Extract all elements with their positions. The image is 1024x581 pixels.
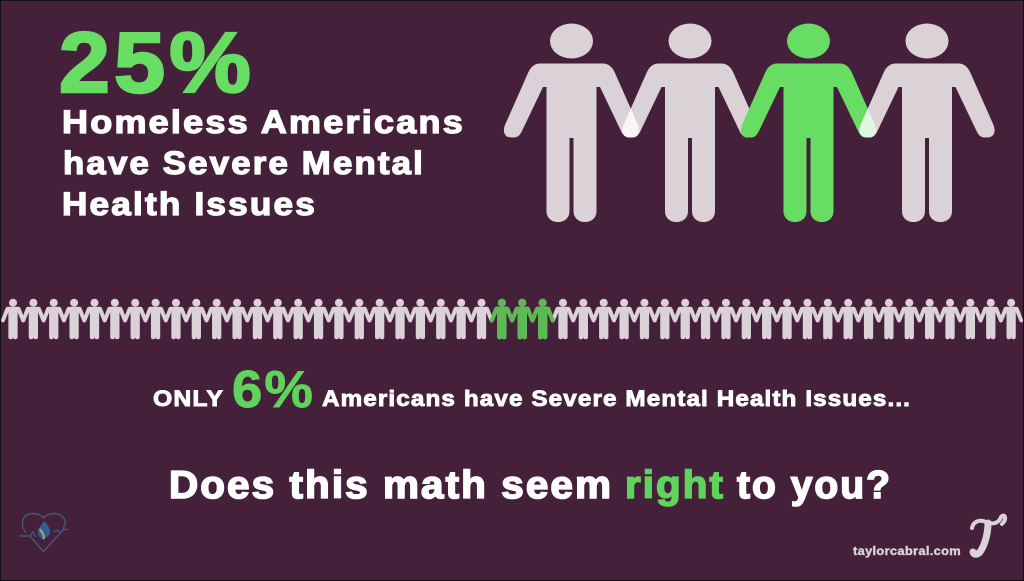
pictogram: row of fifty small figures, three highlighted xyxy=(1,299,1023,339)
pictogram: four large figures holding hands, one in four highlighted xyxy=(504,24,995,222)
headline description xyxy=(62,104,465,222)
comparison statement: only 6%: Americans have Severe Mental Health Issues... xyxy=(322,386,911,411)
closing question: Does this math seem xyxy=(169,464,613,507)
icon: signature letter T logo xyxy=(972,516,1005,554)
headline description: Health Issues xyxy=(62,186,317,222)
comparison statement: only 6% xyxy=(153,361,911,419)
closing question xyxy=(169,464,892,507)
headline stat: 25%: 25% xyxy=(59,16,255,111)
icon: heart with heartbeat and flame logo xyxy=(19,514,68,552)
headline description: have Severe Mental xyxy=(63,145,425,181)
comparison statement: only 6%: 6% xyxy=(232,361,315,419)
headline description: Homeless Americans xyxy=(62,104,465,140)
closing question: right xyxy=(625,464,725,507)
comparison statement: only 6%: ONLY xyxy=(153,386,224,411)
closing question: to you? xyxy=(737,464,892,507)
website credit: taylorcabral.com xyxy=(853,546,961,558)
